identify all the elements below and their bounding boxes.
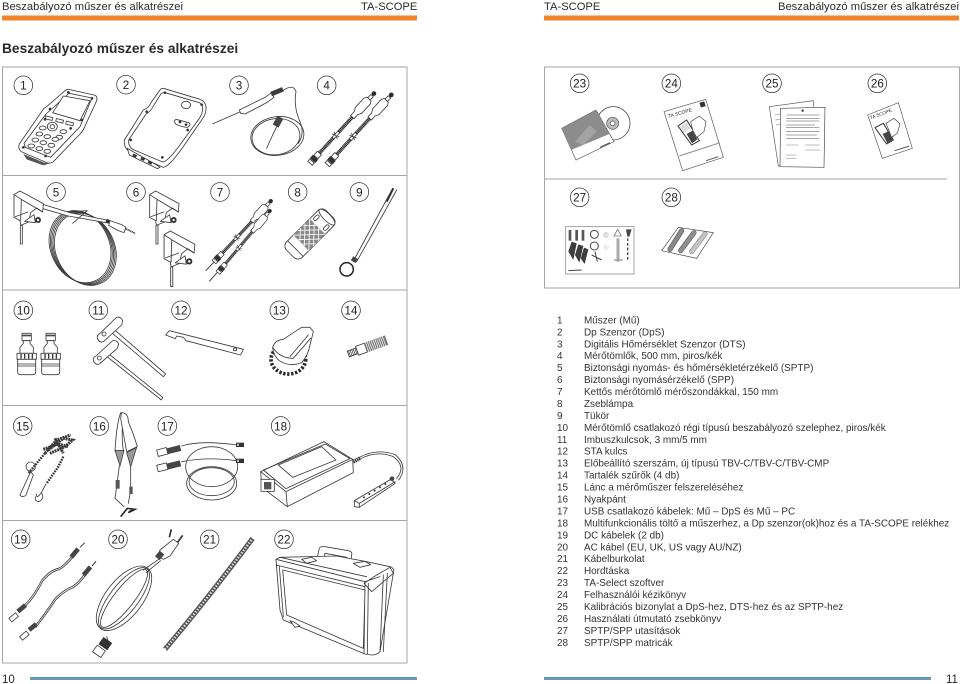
left page header: TA-SCOPE [361,1,417,13]
right page header [544,1,959,20]
parts list: 25 [557,602,569,613]
group: documents [562,74,912,274]
parts list: AC kábel (EU, UK, US vagy AU/NZ) [584,542,742,553]
item 12: STA key [166,301,243,355]
parts list: Biztonsági nyomásérzékelő (SPP) [584,375,734,386]
parts list: 3 [557,339,563,350]
item 28: SPTP/SPP stickers: 28 [665,192,678,205]
parts list: 28 [557,638,569,649]
item 10: hose connectors [14,301,60,375]
item 4: measuring hoses: 4 [323,80,330,93]
group: rows 1 and 2 of parts [14,75,397,296]
parts list: 23 [557,578,569,589]
parts list: 13 [557,459,569,470]
parts list: Kalibrációs bizonylat a DpS-hez, DTS-hez és az SPTP-hez [584,602,843,613]
right page header: TA-SCOPE [544,1,600,13]
parts list: DC kábelek (2 db) [584,530,664,541]
item 15: chain [13,417,73,501]
parts list: 2 [557,327,563,338]
parts list: 26 [557,614,569,625]
parts list: Biztonsági nyomás- és hőmérsékletérzékelő (SPTP) [584,363,813,374]
item 13: presetting tool [270,301,313,374]
parts list: 19 [557,530,569,541]
parts list: 6 [557,375,563,386]
item 18: multifunction charger [261,417,403,507]
item 20: AC cable: 20 [112,534,125,547]
parts list: 18 [557,518,569,529]
item 6: SPP sensors: 6 [133,186,139,199]
item 14: spare filter: 14 [345,305,358,318]
parts list: Hordtáska [584,566,630,577]
item 14: spare filter [342,301,388,359]
parts list: 24 [557,590,569,601]
parts list: Előbeállító szerszám, új típusú TBV-C/TBV-C/TBV-CMP [584,459,830,470]
item 25: calibration certificates: 25 [766,78,778,91]
parts list: Tükör [584,411,610,422]
item 23: software CD: 23 [573,78,586,91]
item 2: Dp sensor [117,75,206,169]
parts list: Műszer (Mű) [584,315,640,326]
item 24: user manual: 24 [665,78,678,91]
item 10: hose connectors: 10 [17,305,30,318]
parts list: 14 [557,471,569,482]
item 11: hex keys [89,301,166,400]
item 24: user manual: TA SCOPE [668,107,693,120]
parts list: 27 [557,626,569,637]
item 27: SPTP/SPP instructions [566,188,634,274]
item 27: SPTP/SPP instructions: 27 [573,192,586,205]
item 28: SPTP/SPP stickers [662,188,713,258]
item 24: user manual [662,74,723,171]
parts list: 4 [557,351,563,362]
parts list: Tartalék szűrők (4 db) [584,471,679,482]
item 3: digital temperature sensor [212,76,306,159]
item 5: SPTP sensor with coiled cable: 5 [53,186,59,199]
parts list: Lánc a mérőműszer felszereléséhez [584,483,743,494]
right page header: Beszabályozó műszer és alkatrészei [778,1,959,13]
item 26: pocket guide: 26 [871,78,884,91]
item 16: neck strap [90,413,137,517]
parts list: 15 [557,483,569,494]
parts list: TA-Select szoftver [584,578,665,589]
item 8: flashlight [282,183,338,262]
item 22: carrying case: 22 [278,534,290,547]
parts list: SPTP/SPP utasítások [584,626,680,637]
item 20: AC cable [86,529,183,657]
parts list: Nyakpánt [584,494,626,506]
item 26: pocket guide [868,74,912,158]
parts list: 11 [557,435,568,446]
item 4: measuring hoses [307,76,396,168]
parts list: 22 [557,566,569,577]
item 2: Dp sensor: 2 [123,79,129,92]
item 17: USB cables: 17 [161,420,174,433]
parts list: Zseblámpa [584,399,634,410]
parts list: Mérőtömlők, 500 mm, piros/kék [584,351,722,362]
panel: right parts frame [544,67,960,288]
item 12: STA key: 12 [175,305,187,318]
item 3: digital temperature sensor: 3 [236,80,242,93]
parts list: 16 [557,494,569,506]
left page footer [2,674,417,684]
parts list: 17 [557,506,569,517]
right page footer [544,674,958,684]
left page header: Beszabályozó műszer és alkatrészei [2,1,183,13]
parts list: 1 [557,315,563,326]
item 7: double hose with probes [206,183,275,281]
item 23: software CD [562,74,630,160]
item 19: DC cables [9,530,96,640]
item 13: presetting tool: 13 [273,305,286,318]
item 1: instrument: 1 [20,80,27,93]
item 9: inspection mirror: 9 [356,186,363,199]
parts list: USB csatlakozó kábelek: Mű – DpS és Mű – PC [584,506,795,517]
parts list: 12 [557,447,569,458]
item 8: flashlight: 8 [294,186,301,199]
parts list: 8 [557,399,563,410]
parts list: 5 [557,363,563,374]
group: rows 3 and 4 of parts [13,301,403,517]
item 26: pocket guide: TA SCOPE [869,108,893,120]
left page header [2,1,417,20]
parts list: SPTP/SPP matricák [584,638,673,649]
item 15: chain: 15 [16,420,29,433]
parts list: Digitális Hőmérséklet Szenzor (DTS) [584,339,746,350]
item 18: multifunction charger: 18 [274,420,287,433]
parts list: Dp Szenzor (DpS) [584,327,665,338]
item 22: carrying case [275,530,394,655]
parts list: 7 [557,387,563,398]
item 21: cable sleeve: 21 [203,534,216,547]
parts list: 9 [557,411,563,422]
item 6: SPP sensors [127,183,195,287]
parts list [557,315,949,649]
parts list: STA kulcs [584,447,627,458]
parts list: Felhasználói kézikönyv [584,590,686,601]
item 17: USB cables [157,417,244,500]
parts list: 21 [557,554,569,565]
item 25: calibration certificates [763,74,825,167]
parts list: Kábelburkolat [584,554,645,565]
item 19: DC cables: 19 [14,534,27,547]
parts list: 20 [557,542,569,553]
group: row 5 of parts [9,529,394,657]
parts list: Használati útmutató zsebkönyv [584,614,721,625]
parts list: Mérőtömlő csatlakozó régi típusú beszabályozó szelephez, piros/kék [584,423,886,434]
item 5: SPTP sensor with coiled cable [14,183,135,296]
item 7: double hose with probes: 7 [217,186,223,199]
item 1: instrument [14,76,97,165]
item 11: hex keys: 11 [92,305,104,318]
parts list: Imbuszkulcsok, 3 mm/5 mm [584,435,707,446]
title: Beszabályozó műszer és alkatrészei [2,41,238,56]
parts list: Kettős mérőtömlő mérőszondákkal, 150 mm [584,387,778,398]
item 16: neck strap: 16 [93,420,106,433]
item 9: inspection mirror [340,183,397,276]
item 21: cable sleeve [165,530,253,649]
parts list: 10 [557,423,569,434]
parts list: Multifunkcionális töltő a műszerhez, a Dp szenzor(ok)hoz és a TA-SCOPE relékhez [584,518,949,529]
panel: left parts frame [2,67,407,663]
